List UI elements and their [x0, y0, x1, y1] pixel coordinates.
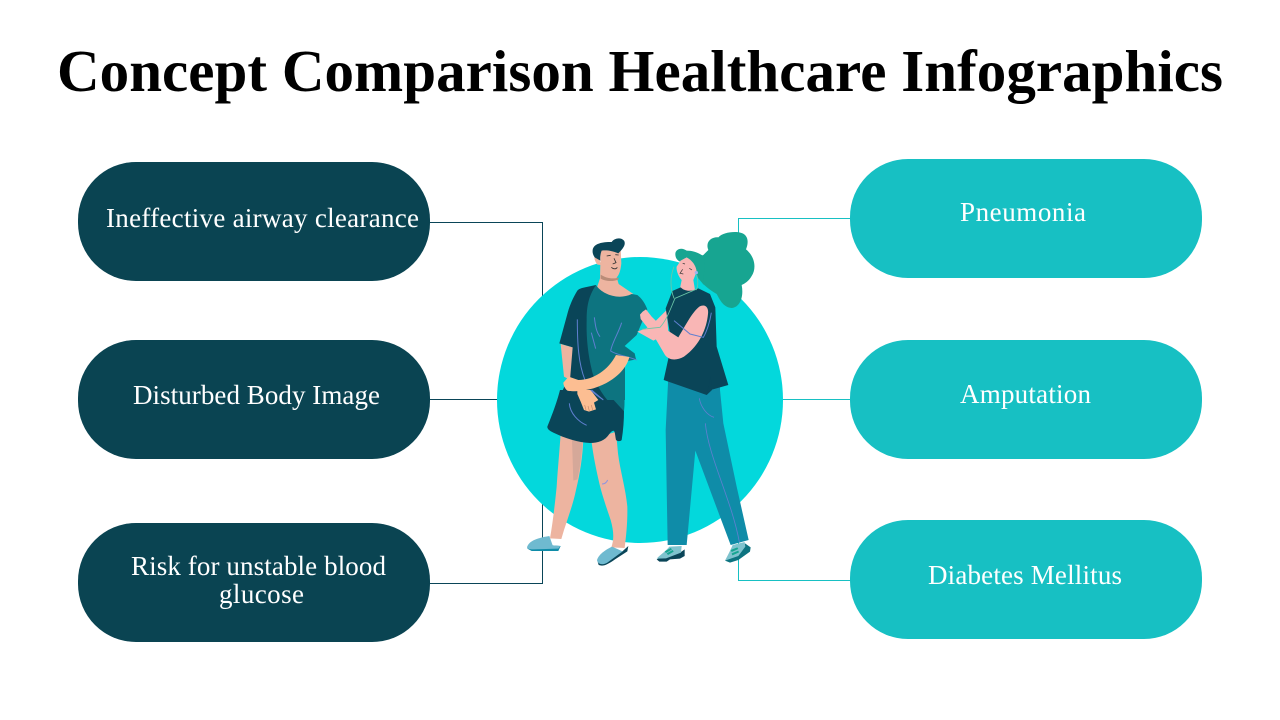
- pill: amputation: Amputation: [960, 379, 1092, 409]
- pill: risk for unstable blood glucose: [78, 523, 430, 642]
- pill: ineffective airway clearance: Ineffective airway clearance: [106, 203, 419, 233]
- connectors: right: [738, 218, 850, 580]
- central circle: [497, 257, 783, 543]
- pill: disturbed body image: Disturbed Body Image: [133, 380, 380, 410]
- pill: diabetes mellitus: [850, 520, 1202, 639]
- pill: pneumonia: [850, 159, 1202, 278]
- pill: diabetes mellitus: Diabetes Mellitus: [928, 560, 1122, 590]
- pill: disturbed body image: [78, 340, 430, 459]
- pill: amputation: [850, 340, 1202, 459]
- illustration: man: [527, 238, 647, 566]
- pill: risk for unstable blood glucose: glucose: [219, 579, 304, 609]
- title: Concept Comparison Healthcare Infographics: [57, 38, 1223, 104]
- connectors: left: [430, 222, 542, 584]
- pill: risk for unstable blood glucose: Risk for unstable blood: [131, 551, 386, 581]
- pill: ineffective airway clearance: [78, 162, 430, 281]
- illustration: woman: [637, 232, 754, 563]
- pill: pneumonia: Pneumonia: [960, 197, 1086, 227]
